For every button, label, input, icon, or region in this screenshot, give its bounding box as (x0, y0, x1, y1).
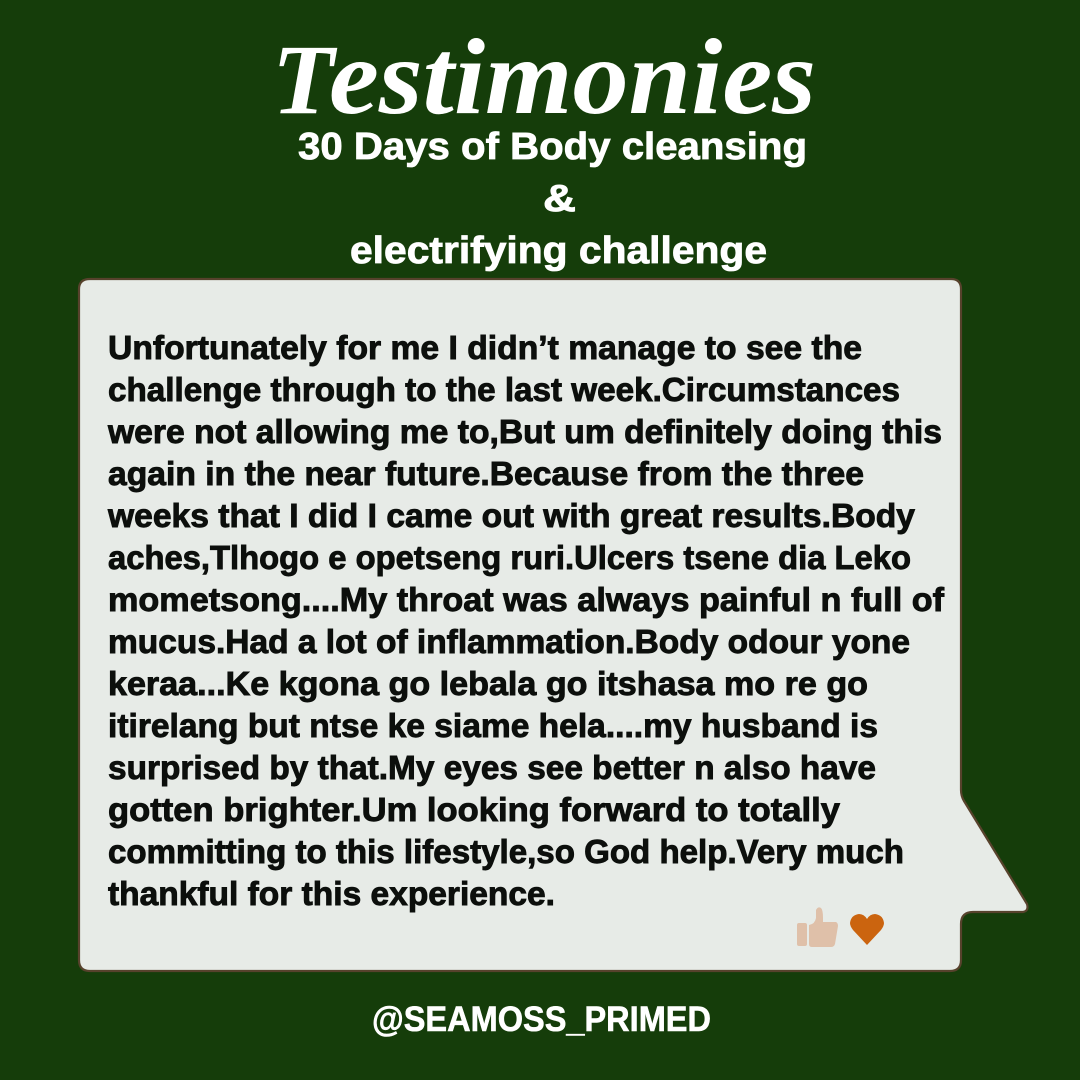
icon: thumbs up (797, 907, 838, 947)
subtitle (298, 126, 807, 272)
testimonial text: thankful for this experience. (108, 875, 555, 912)
icon: heart (850, 914, 884, 945)
testimonial text: gotten brighter.Um looking forward to totally (108, 791, 841, 828)
testimonial text: weeks that I did I came out with great results.Body (107, 497, 916, 534)
testimonial text: surprised by that.My eyes see better n also have (108, 749, 876, 786)
testimonial text: committing to this lifestyle,so God help.Very much (108, 833, 904, 870)
testimonial text: itirelang but ntse ke siame hela....my husband is (108, 707, 878, 744)
testimonial text: keraa...Ke kgona go lebala go itshasa mo re go (108, 665, 868, 702)
testimonial text: mometsong....My throat was always painful n full of (108, 581, 945, 618)
testimonial text (107, 329, 945, 912)
subtitle: & (543, 178, 576, 220)
subtitle: 30 Days of Body cleansing (298, 126, 807, 168)
testimonial text: were not allowing me to,But um definitely doing this (107, 413, 942, 450)
testimonial text: aches,Tlhogo e opetseng ruri.Ulcers tsene dia Leko (108, 539, 911, 576)
social handle: @SEAMOSS_PRIMED (372, 1000, 711, 1039)
testimonial text: again in the near future.Because from the three (108, 455, 864, 492)
title: estimonies (329, 18, 816, 137)
testimonial text: challenge through to the last week.Circumstances (108, 371, 900, 408)
subtitle: electrifying challenge (350, 230, 767, 272)
panel: speech bubble (79, 279, 1028, 971)
title: T (272, 24, 338, 135)
testimonial text: mucus.Had a lot of inflammation.Body odour yone (108, 623, 910, 660)
testimonial text: Unfortunately for me I didn’t manage to see the (108, 329, 862, 366)
